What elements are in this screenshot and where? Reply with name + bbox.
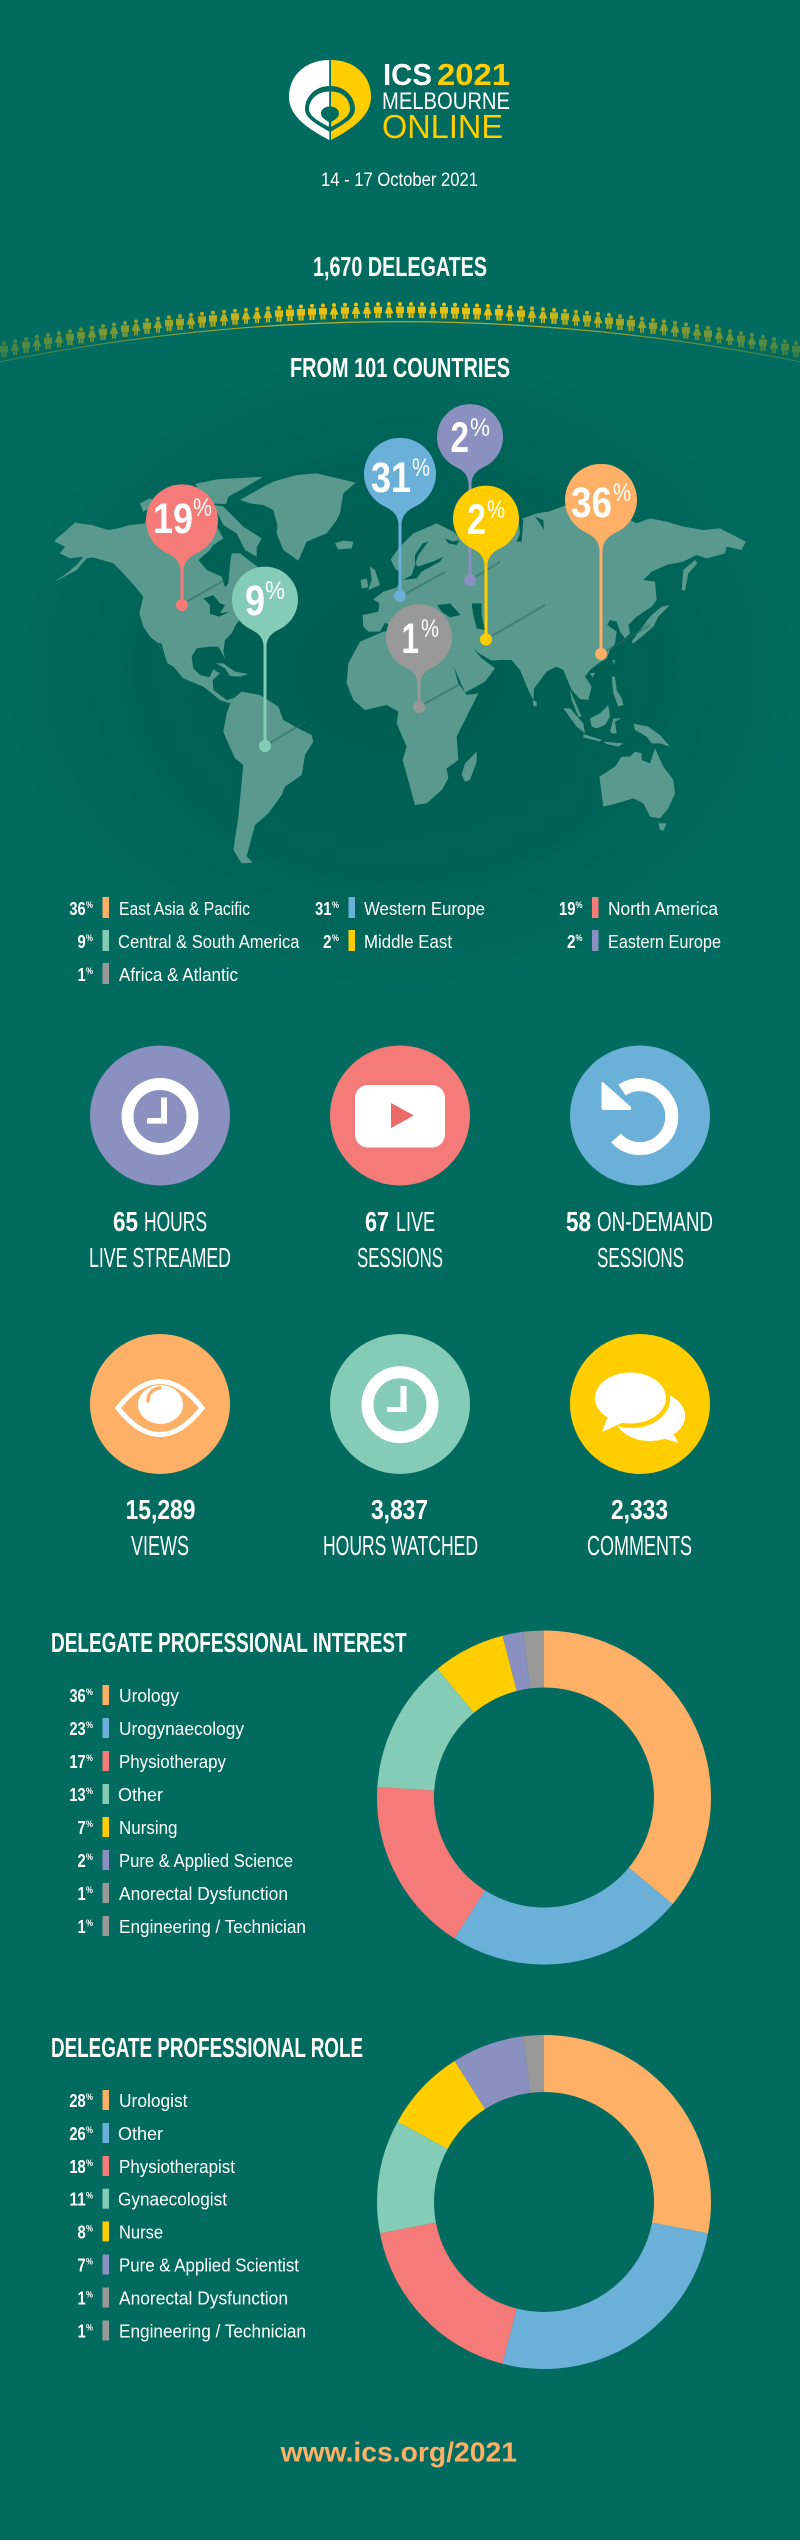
item: Urologist: 28 bbox=[69, 2091, 86, 2111]
item: Nursing bbox=[78, 1817, 178, 1838]
pin: Eastern Europe 2%: % bbox=[470, 414, 490, 442]
item: Urology bbox=[69, 1685, 179, 1706]
item: Anorectal Dysfunction: Anorectal Dysfunction bbox=[119, 2288, 288, 2308]
item: Urogynaecology: % bbox=[86, 1720, 93, 1730]
item: Urology: % bbox=[86, 1687, 93, 1697]
item: Engineering / Technician: % bbox=[86, 1918, 93, 1928]
map: Iceland bbox=[335, 541, 353, 549]
map: New Guinea bbox=[633, 723, 670, 747]
legend: Eastern Europe: % bbox=[576, 933, 582, 943]
legend: Western Europe: % bbox=[332, 900, 339, 910]
region legend bbox=[69, 897, 721, 985]
item: Urologist: Urologist bbox=[119, 2091, 188, 2111]
map: Greenland bbox=[240, 473, 356, 561]
legend: Eastern Europe: 2 bbox=[567, 932, 576, 952]
map: Sulawesi bbox=[610, 718, 622, 733]
pin: Africa 1% bbox=[386, 604, 452, 713]
icon: play button bbox=[330, 1046, 470, 1186]
legend: East Asia & Pacific: % bbox=[86, 900, 93, 910]
pin: Middle East 2%: % bbox=[487, 496, 505, 524]
pin: Middle East 2%: 2 bbox=[467, 496, 486, 544]
item: Nursing: 7 bbox=[78, 1818, 86, 1838]
item: Physiotherapy: % bbox=[86, 1753, 93, 1763]
map: Great Britain bbox=[368, 567, 380, 590]
item: Other: Other bbox=[118, 1785, 163, 1805]
legend: Africa & Atlantic: Africa & Atlantic bbox=[119, 965, 238, 985]
legend: North America: % bbox=[576, 900, 582, 910]
stat label: VIEWS bbox=[131, 1530, 189, 1561]
map: Australia bbox=[599, 748, 675, 818]
map: Sakhalin peninsula bbox=[682, 560, 697, 591]
item: Engineering / Technician: 1 bbox=[78, 2322, 86, 2342]
item: Urogynaecology bbox=[69, 1718, 244, 1739]
stat label line 2: SESSIONS bbox=[597, 1242, 684, 1273]
map: Eurasia region bbox=[361, 505, 746, 700]
pin: Western Europe 31% bbox=[364, 438, 436, 602]
stat label: LIVE bbox=[396, 1206, 435, 1237]
item: Urologist bbox=[69, 2090, 188, 2111]
legend: Central & South America: Central & South America bbox=[118, 932, 300, 952]
item: Nurse: Nurse bbox=[119, 2222, 163, 2242]
item: Pure & Applied Science: % bbox=[86, 1852, 93, 1862]
map: Malay peninsula bbox=[570, 690, 582, 717]
pin shadows bbox=[186, 562, 650, 743]
item: Other: % bbox=[86, 1786, 93, 1796]
item: Anorectal Dysfunction: Anorectal Dysfunction bbox=[119, 1884, 288, 1904]
map: inland seas bbox=[403, 517, 544, 630]
map: South America bbox=[223, 692, 313, 863]
item: Physiotherapy bbox=[69, 1751, 226, 1772]
item: Physiotherapist: Physiotherapist bbox=[119, 2157, 235, 2177]
pin: Eastern Europe 2% bbox=[437, 404, 503, 586]
stat number: 58 bbox=[566, 1206, 591, 1237]
item: Pure & Applied Scientist: 7 bbox=[78, 2256, 86, 2276]
legend: Africa & Atlantic: % bbox=[86, 966, 93, 976]
map: Baja California bbox=[158, 643, 167, 663]
item: Physiotherapy: Physiotherapy bbox=[119, 1752, 226, 1772]
legend: North America bbox=[559, 897, 719, 919]
map: Africa and South America bbox=[223, 630, 478, 863]
map background glow bbox=[0, 350, 800, 990]
map: North America bbox=[53, 503, 263, 703]
item: Urology: 36 bbox=[69, 1686, 86, 1706]
pin: North America 19% bbox=[146, 484, 218, 611]
legend: Western Europe: 31 bbox=[315, 899, 332, 919]
stat: live sessions bbox=[330, 1046, 470, 1273]
item: Nursing: Nursing bbox=[119, 1818, 178, 1838]
stat label: ON-DEMAND bbox=[597, 1206, 713, 1237]
role legend bbox=[69, 2090, 306, 2342]
item: Engineering / Technician: Engineering / Technician bbox=[119, 1917, 306, 1937]
map: Canadian Arctic islands bbox=[140, 477, 263, 557]
map: Americas north bbox=[53, 473, 356, 703]
item: Engineering / Technician: Engineering / Technician bbox=[119, 2322, 306, 2342]
item: Physiotherapist: 18 bbox=[69, 2157, 86, 2177]
item: Anorectal Dysfunction: % bbox=[86, 2290, 93, 2300]
item: Engineering / Technician: 1 bbox=[78, 1917, 86, 1937]
item: Nurse bbox=[78, 2221, 163, 2242]
item: Engineering / Technician: % bbox=[86, 2322, 93, 2332]
icon: replay arrow bbox=[570, 1046, 710, 1186]
legend: Middle East bbox=[323, 930, 452, 952]
donut chart: professional role bbox=[406, 2064, 682, 2340]
map: Tasmania bbox=[658, 823, 667, 831]
pin: Western Europe 31%: 31 bbox=[371, 454, 411, 502]
map: Madagascar bbox=[462, 752, 477, 782]
item: Gynaecologist: Gynaecologist bbox=[118, 2190, 227, 2210]
legend: East Asia & Pacific: East Asia & Pacific bbox=[119, 899, 250, 919]
item: Urology: Urology bbox=[119, 1686, 179, 1706]
stat label line 2: LIVE STREAMED bbox=[89, 1242, 231, 1273]
map: Japan bbox=[632, 605, 670, 643]
icon: clock bbox=[90, 1046, 230, 1186]
item: Urogynaecology: Urogynaecology bbox=[119, 1719, 244, 1739]
item: Physiotherapy: 17 bbox=[69, 1752, 86, 1772]
logo text: 2021: 2021 bbox=[437, 57, 510, 92]
item: Anorectal Dysfunction: 1 bbox=[78, 2288, 86, 2308]
interest legend bbox=[69, 1685, 306, 1937]
legend: East Asia & Pacific: 36 bbox=[69, 899, 86, 919]
map: Ireland bbox=[361, 578, 368, 588]
item: Nurse: % bbox=[86, 2223, 93, 2233]
heading: countries: FROM 101 COUNTRIES bbox=[290, 352, 510, 383]
map: Asia-Pacific islands bbox=[533, 660, 675, 831]
pin: Central and South America 9%: % bbox=[265, 577, 285, 605]
item: Other: % bbox=[86, 2125, 93, 2135]
stat number: 3,837 bbox=[371, 1494, 428, 1525]
stat: comments bbox=[570, 1334, 710, 1561]
stat number: 67 bbox=[365, 1206, 389, 1237]
legend: North America: North America bbox=[608, 899, 719, 919]
item: Anorectal Dysfunction: 1 bbox=[78, 1884, 86, 1904]
stat: hours live streamed bbox=[89, 1046, 231, 1273]
icon: logo teardrop bbox=[289, 60, 371, 140]
map: Cuba and Hispaniola bbox=[216, 663, 248, 677]
map: Sri Lanka bbox=[533, 700, 537, 707]
stat number: 15,289 bbox=[126, 1494, 196, 1525]
icon: speech bubbles bbox=[570, 1334, 710, 1474]
donut chart: professional interest bbox=[406, 1659, 682, 1936]
item: Gynaecologist bbox=[69, 2189, 227, 2210]
icon: eye bbox=[90, 1334, 230, 1474]
item: Other: Other bbox=[118, 2124, 163, 2144]
item: Pure & Applied Science: 2 bbox=[78, 1851, 86, 1871]
stat label: COMMENTS bbox=[587, 1530, 692, 1561]
legend: East Asia & Pacific bbox=[69, 897, 250, 919]
heading: delegate professional role: DELEGATE PROFESSIONAL ROLE bbox=[51, 2032, 363, 2063]
pin: Middle East 2% bbox=[453, 486, 519, 646]
map: Eurasia bbox=[363, 505, 746, 700]
legend: Central & South America: 9 bbox=[78, 932, 86, 952]
legend: North America: 19 bbox=[559, 899, 576, 919]
item: Nurse: 8 bbox=[78, 2222, 86, 2242]
legend: Western Europe: Western Europe bbox=[364, 899, 485, 919]
icon: clock bbox=[330, 1334, 470, 1474]
item: Physiotherapist: % bbox=[86, 2158, 93, 2168]
item: Pure & Applied Science: Pure & Applied Science bbox=[119, 1851, 293, 1871]
item: Pure & Applied Scientist: Pure & Applied Scientist bbox=[119, 2256, 299, 2276]
pin: East Asia and Pacific 36%: 36 bbox=[571, 479, 612, 527]
item: Nursing: % bbox=[86, 1819, 93, 1829]
world map bbox=[53, 473, 746, 863]
pin: East Asia and Pacific 36% bbox=[565, 464, 637, 660]
stat label line 2: SESSIONS bbox=[357, 1242, 443, 1273]
stat number: 65 bbox=[113, 1206, 138, 1237]
legend: Central & South America: % bbox=[86, 933, 93, 943]
item: Physiotherapist bbox=[69, 2156, 235, 2177]
stat label: HOURS WATCHED bbox=[323, 1530, 478, 1561]
website link: www.ics.org/2021 bbox=[280, 2436, 517, 2468]
legend: Middle East: 2 bbox=[323, 932, 332, 952]
item: Urologist: % bbox=[86, 2092, 93, 2102]
item: Pure & Applied Scientist: % bbox=[86, 2256, 93, 2266]
stat: on-demand sessions bbox=[566, 1046, 713, 1273]
logo text: ONLINE: ONLINE bbox=[382, 108, 503, 145]
legend: Middle East: % bbox=[332, 933, 339, 943]
item: Other bbox=[69, 2123, 163, 2144]
legend: Africa & Atlantic: 1 bbox=[78, 965, 86, 985]
item: Gynaecologist: 11 bbox=[69, 2190, 86, 2210]
map: Africa bbox=[347, 630, 478, 805]
stat label: HOURS bbox=[144, 1206, 207, 1237]
item: Other: 13 bbox=[69, 1785, 86, 1805]
item: Other: 26 bbox=[69, 2124, 86, 2144]
map: Java and Sunda islands bbox=[583, 734, 623, 747]
stat number: 2,333 bbox=[611, 1494, 668, 1525]
logo: ICS 2021 Melbourne Online bbox=[289, 57, 510, 145]
map: Philippines bbox=[612, 677, 623, 707]
map: Sumatra bbox=[563, 708, 585, 733]
pin: Central and South America 9% bbox=[232, 567, 298, 752]
map: Borneo bbox=[590, 705, 610, 728]
pin: Eastern Europe 2%: 2 bbox=[450, 414, 469, 462]
item: Anorectal Dysfunction: % bbox=[86, 1885, 93, 1895]
stat: views bbox=[90, 1334, 230, 1561]
people arc bbox=[0, 302, 800, 362]
pin: Africa 1%: 1 bbox=[402, 615, 419, 663]
logo text: ICS: ICS bbox=[383, 57, 432, 92]
pin: East Asia and Pacific 36%: % bbox=[613, 479, 631, 507]
legend: Middle East: Middle East bbox=[364, 932, 452, 952]
map: Great Lakes bbox=[203, 595, 230, 617]
pin: Western Europe 31%: % bbox=[412, 454, 430, 482]
legend: Africa & Atlantic bbox=[78, 963, 238, 985]
legend: Eastern Europe bbox=[567, 930, 721, 952]
heading: delegates: 1,670 DELEGATES bbox=[313, 251, 487, 282]
pin: Africa 1%: % bbox=[421, 615, 439, 643]
pin: North America 19%: 19 bbox=[153, 495, 193, 543]
item: Other bbox=[69, 1784, 163, 1805]
pin: Central and South America 9%: 9 bbox=[245, 577, 265, 625]
heading: delegate professional interest: DELEGATE PROFESSIONAL INTEREST bbox=[51, 1627, 407, 1658]
map pins bbox=[146, 404, 637, 752]
legend: Eastern Europe: Eastern Europe bbox=[608, 932, 721, 952]
item: Urogynaecology: 23 bbox=[69, 1719, 86, 1739]
item: Gynaecologist: % bbox=[86, 2191, 93, 2201]
map: Taiwan and Hainan bbox=[590, 660, 615, 677]
pin: North America 19%: % bbox=[193, 494, 212, 522]
stat: hours watched bbox=[323, 1334, 478, 1561]
event date: 14 - 17 October 2021 bbox=[321, 170, 478, 191]
legend: Western Europe bbox=[315, 897, 485, 919]
logo text: MELBOURNE: MELBOURNE bbox=[382, 88, 510, 115]
